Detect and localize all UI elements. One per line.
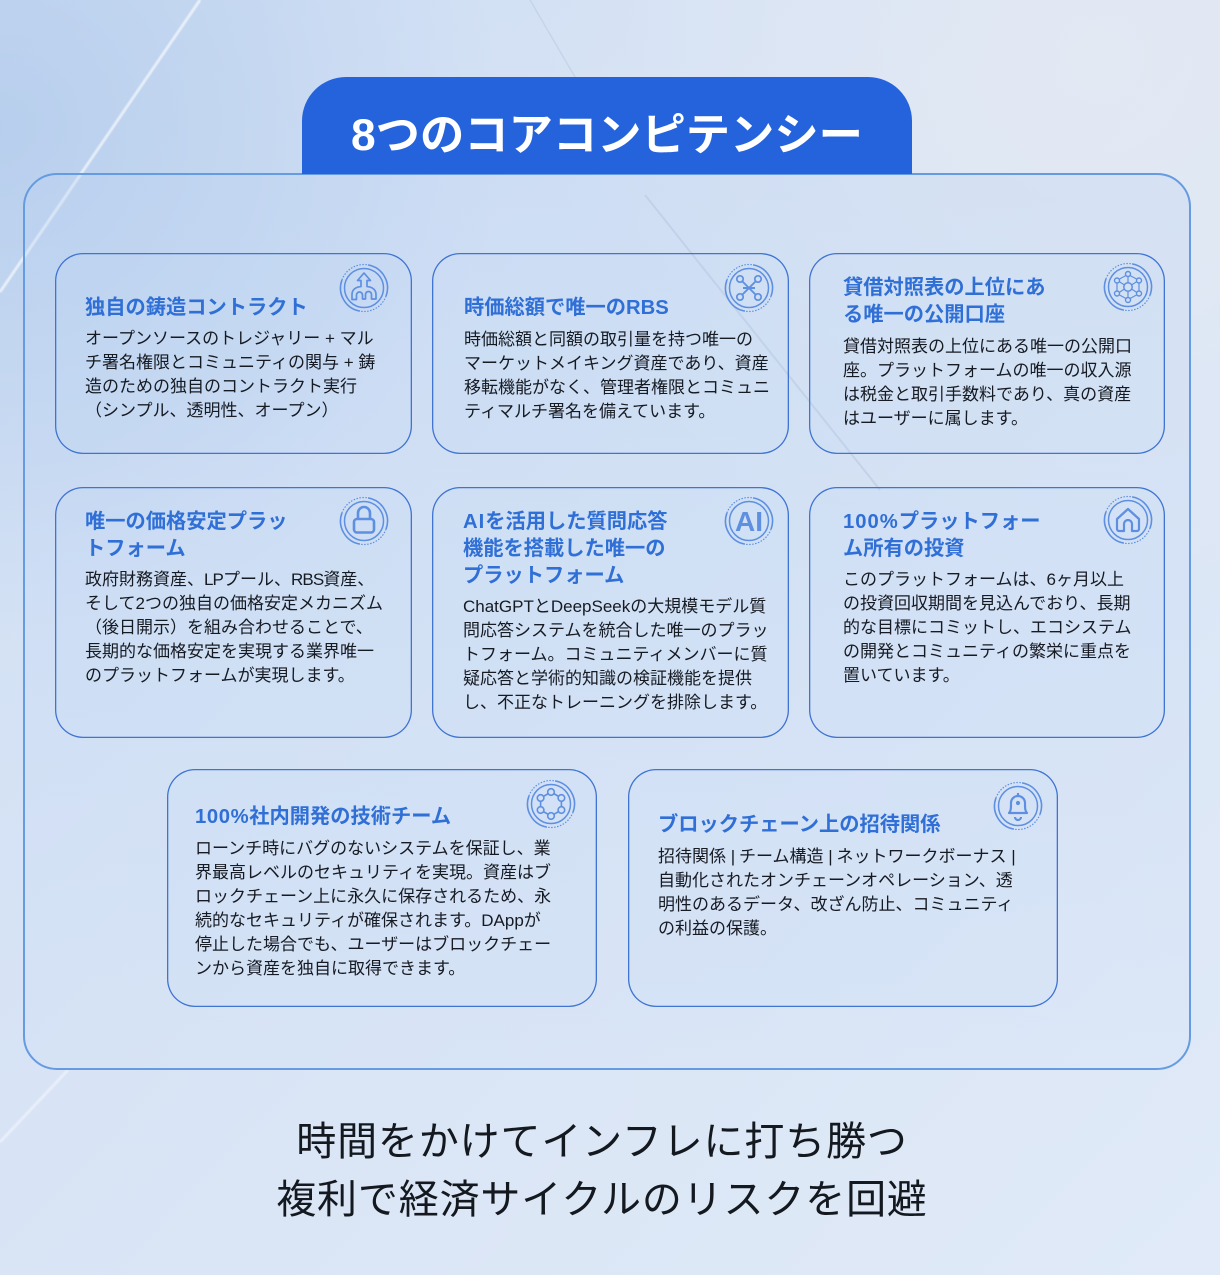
body text: 時価総額と同額の取引量を持つ唯一の (464, 330, 753, 349)
body text: ローンチ時にバグのないシステムを保証し、業 (195, 838, 551, 858)
body text: 招待関係 | チーム構造 | ネットワークボーナス | (658, 846, 1015, 866)
main rounded panel (23, 173, 1191, 1070)
icon: padlock (340, 496, 388, 546)
card 1: 独自の鋳造コントラクト (55, 253, 412, 454)
heading: トフォーム (85, 538, 186, 560)
body text (463, 597, 768, 712)
icon: bell (994, 782, 1042, 830)
card 2: 時価総額で唯一のRBS (432, 253, 789, 454)
heading: 独自の鋳造コントラクト (85, 296, 308, 318)
icon: AI badge (724, 496, 774, 546)
heading: プラットフォーム (463, 564, 624, 586)
body text: このプラットフォームは、6ヶ月以上 (843, 570, 1124, 588)
body text: 的な目標にコミットし、エコシステム (843, 618, 1132, 636)
body text: 疑応答と学術的知識の検証機能を提供 (463, 669, 752, 688)
body text: 続的なセキュリティが確保されます。DAppが (195, 910, 541, 930)
icon: hub network (1104, 262, 1152, 312)
body text: はユーザーに属します。 (843, 409, 1028, 428)
heading: ブロックチェーン上の招待関係 (658, 814, 940, 836)
closing slogan: 時間をかけてインフレに打ち勝つ (296, 1120, 908, 1164)
body text: 長期的な価格安定を実現する業界唯一 (85, 642, 374, 660)
body text (195, 838, 551, 978)
body text: チ署名権限とコミュニティの関与 + 鋳 (85, 353, 375, 372)
body text: のプラットフォームが実現します。 (85, 666, 355, 684)
body text (843, 337, 1132, 428)
body text: 置いています。 (843, 666, 960, 684)
heading: 100%プラットフォー (843, 510, 1041, 532)
body text: ロックチェーン上に永久に保存されるため、永 (195, 886, 551, 906)
heading (843, 276, 1046, 326)
body text: の投資回収期間を見込んでおり、長期 (843, 594, 1130, 612)
body text: 問応答システムを統合した唯一のプラッ (463, 621, 768, 640)
heading: 唯一の価格安定プラッ (85, 510, 288, 532)
body text: 界最高レベルのセキュリティを実現。資産はブ (195, 862, 551, 882)
icon: AI badge: AI (735, 506, 763, 537)
title tab: 8つのコアコンピテンシー (351, 111, 863, 160)
closing slogan (276, 1120, 928, 1222)
body text: ンから資産を独自に取得できます。 (195, 958, 465, 978)
heading: 機能を搭載した唯一の (463, 538, 666, 560)
heading (85, 510, 288, 560)
icon: upward fork (340, 264, 388, 312)
body text: 造のための独自のコントラクト実行 (85, 377, 357, 396)
body text (85, 329, 375, 420)
body text: 明性のあるデータ、改ざん防止、コミュニティ (658, 894, 1013, 914)
heading: 100%社内開発の技術チーム (195, 806, 451, 828)
card 5: AIを活用した質問応答機能 (432, 487, 789, 738)
body text: オープンソースのトレジャリー + マル (85, 329, 374, 348)
heading (463, 510, 668, 586)
body text: 座。プラットフォームの唯一の収入源 (843, 361, 1132, 380)
heading: 時価総額で唯一のRBS (464, 296, 669, 318)
body text: そして2つの独自の価格安定メカニズム (85, 594, 383, 612)
body text: ChatGPTとDeepSeekの大規模モデル質 (463, 597, 766, 616)
body text (658, 846, 1015, 938)
body text: （シンプル、透明性、オープン） (85, 401, 338, 420)
body text: の利益の保護。 (658, 918, 777, 938)
card 8: ブロックチェーン上の招待関係 (628, 769, 1058, 1007)
body text (85, 570, 383, 684)
card 7: 100%社内開発の技術チーム (167, 769, 597, 1007)
title tab (302, 77, 912, 174)
body text: 停止した場合でも、ユーザーはブロックチェー (195, 934, 551, 954)
icon: node ring (526, 780, 576, 828)
closing slogan: 複利で経済サイクルのリスクを回避 (276, 1178, 928, 1222)
body text: （後日開示）を組み合わせることで、 (85, 618, 373, 636)
body text: 移転機能がなく、管理者権限とコミュニ (464, 378, 770, 397)
heading: ム所有の投資 (843, 538, 965, 560)
card 6: 100%プラットフォーム所有の投資 (809, 487, 1165, 738)
body text: 政府財務資産、LPプール、RBS資産、 (85, 570, 374, 588)
body text: の開発とコミュニティの繁栄に重点を (843, 642, 1131, 660)
body text: 自動化されたオンチェーンオペレーション、透 (658, 870, 1013, 890)
body text: ティマルチ署名を備えています。 (464, 402, 715, 421)
icon: house (1104, 496, 1152, 544)
body text (464, 330, 770, 421)
body text: トフォーム。コミュニティメンバーに質 (463, 645, 767, 664)
heading: る唯一の公開口座 (843, 304, 1005, 326)
card 3: 貸借対照表の上位にある唯一の公開口座 (809, 253, 1165, 454)
heading: 貸借対照表の上位にあ (843, 276, 1046, 298)
card 4: 唯一の価格安定プラットフォーム (55, 487, 412, 738)
body text (843, 570, 1132, 684)
icon: network cross (724, 264, 774, 312)
body text: 貸借対照表の上位にある唯一の公開口 (843, 337, 1132, 356)
heading (843, 510, 1041, 560)
body text: マーケットメイキング資産であり、資産 (464, 354, 769, 373)
body text: は税金と取引手数料であり、真の資産 (843, 385, 1131, 404)
body text: し、不正なトレーニングを排除します。 (463, 693, 767, 712)
heading: AIを活用した質問応答 (463, 510, 668, 532)
